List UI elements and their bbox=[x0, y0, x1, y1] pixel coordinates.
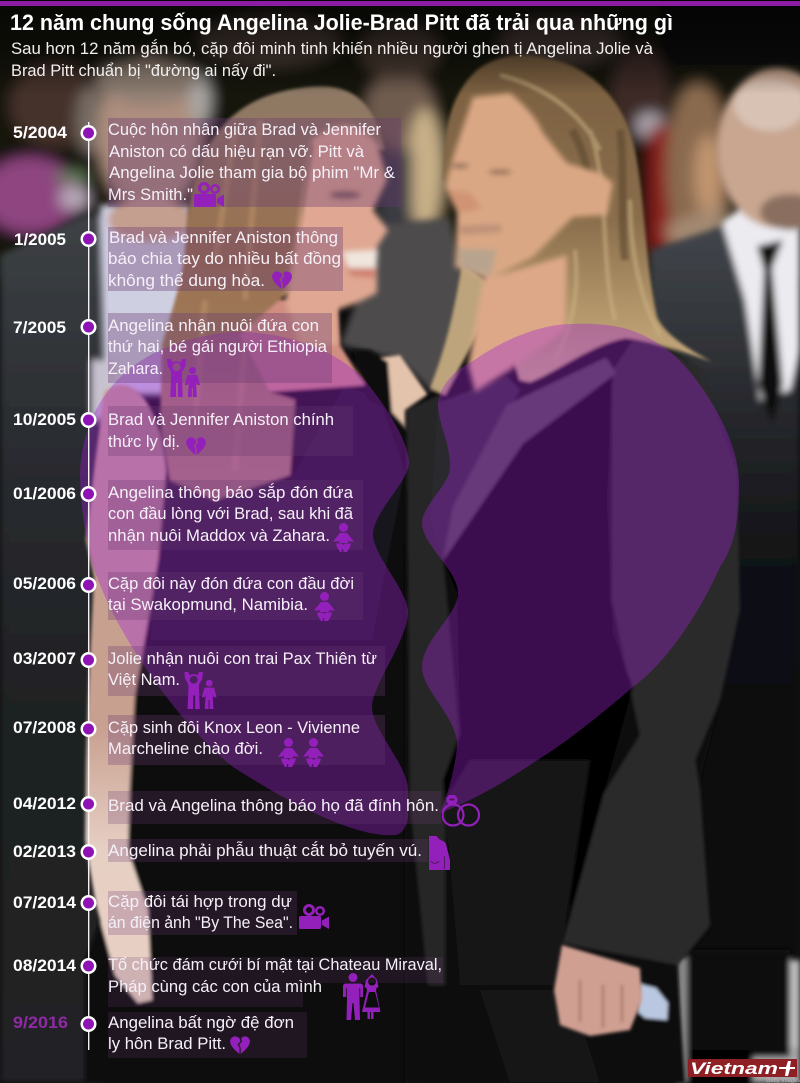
light ground behind the legs bbox=[677, 950, 800, 1083]
event: 1/2005: không thể dung hòa. bbox=[108, 271, 265, 290]
event: 1/2005: 1/2005 bbox=[14, 231, 66, 249]
event: 07/2008 bbox=[13, 715, 385, 767]
event: 9/2016: 9/2016 bbox=[13, 1014, 68, 1032]
event: 04/2012: Brad và Angelina thông báo họ đã đính hôn. bbox=[108, 796, 439, 815]
event: 05/2006: tại Swakopmund, Namibia. bbox=[108, 595, 308, 614]
grey jacket behind Brad's shoulder bbox=[340, 218, 470, 400]
event: 03/2007: 03/2007 bbox=[13, 650, 76, 668]
event: 03/2007: Việt Nam. bbox=[108, 670, 180, 689]
event: 01/2006: con đầu lòng với Brad, sau khi đã bbox=[108, 504, 354, 523]
event: 7/2005: Angelina nhận nuôi đứa con bbox=[108, 316, 319, 335]
event: 02/2013: 02/2013 bbox=[13, 843, 76, 861]
event: 08/2014: 08/2014 bbox=[13, 957, 77, 975]
right bald man bbox=[650, 68, 800, 1000]
event: 03/2007: Jolie nhận nuôi con trai Pax Thiên từ bbox=[108, 649, 377, 668]
event: 05/2006 bbox=[13, 572, 363, 621]
event: 07/2014: 07/2014 bbox=[13, 894, 77, 912]
Angelina's face bbox=[285, 126, 388, 345]
subtitle bbox=[11, 39, 654, 80]
event: 03/2007 bbox=[13, 646, 385, 709]
Brad's face bbox=[445, 93, 613, 392]
jacket front bbox=[443, 373, 633, 985]
event: 9/2016 bbox=[13, 1012, 307, 1058]
event: 07/2014: Cặp đôi tái hợp trong dự bbox=[108, 892, 292, 911]
event: 1/2005 bbox=[14, 227, 343, 291]
event: 10/2005: 10/2005 bbox=[13, 411, 76, 429]
event: 01/2006: Angelina thông báo sắp đón đứa bbox=[108, 483, 354, 502]
dress bbox=[85, 383, 420, 1083]
event: 9/2016: Angelina bất ngờ đệ đơn bbox=[108, 1013, 294, 1032]
event: 01/2006: nhận nuôi Maddox và Zahara. bbox=[108, 526, 330, 545]
left knit band bbox=[407, 395, 460, 985]
arm bbox=[85, 385, 166, 1003]
event: 5/2004: 5/2004 bbox=[13, 124, 68, 142]
event: 1/2005: Brad và Jennifer Aniston thông bbox=[109, 228, 338, 247]
event: 5/2004 bbox=[13, 118, 401, 207]
event: 02/2013: Angelina phải phẫu thuật cắt bỏ tuyến vú. bbox=[108, 841, 422, 860]
grey trouser patch bbox=[480, 990, 600, 1083]
top bar bbox=[0, 1, 800, 6]
event: 7/2005 bbox=[13, 313, 332, 397]
event: 08/2014: Tổ chức đám cưới bí mật tại Chateau Miraval, bbox=[108, 955, 442, 974]
lower jacket front bbox=[445, 760, 590, 985]
phone bbox=[638, 984, 668, 1020]
top dark fade bbox=[0, 0, 800, 95]
broken heart: right half bbox=[422, 324, 739, 813]
hair bbox=[443, 55, 712, 382]
event: 07/2008: Cặp sinh đôi Knox Leon - Vivienne bbox=[108, 718, 360, 737]
blurred crowd behind the couple bbox=[0, 0, 800, 280]
event: 01/2006: 01/2006 bbox=[13, 485, 76, 503]
event: 07/2008: 07/2008 bbox=[13, 719, 76, 737]
logo: Vietnam+ bbox=[688, 1059, 797, 1078]
event: 10/2005: thức ly dị. bbox=[108, 432, 180, 451]
subtitle: Sau hơn 12 năm gắn bó, cặp đôi minh tinh khiến nhiều người ghen tị Angelina Jolie và bbox=[11, 39, 654, 58]
broken heart: left half bbox=[80, 332, 409, 835]
event: 01/2006 bbox=[13, 480, 363, 552]
event: 7/2005: thứ hai, bé gái người Ethiopia bbox=[108, 337, 328, 356]
event: 04/2012: 04/2012 bbox=[13, 795, 76, 813]
event: 9/2016: ly hôn Brad Pitt. bbox=[108, 1034, 226, 1053]
shoulder bbox=[362, 355, 428, 440]
event: 05/2006: 05/2006 bbox=[13, 575, 76, 593]
event: 05/2006: Cặp đôi này đón đứa con đầu đời bbox=[108, 574, 354, 593]
event: 02/2013 bbox=[13, 836, 450, 870]
event: 08/2014 bbox=[13, 955, 443, 1020]
Brad bbox=[405, 55, 740, 1083]
event: 10/2005 bbox=[13, 406, 353, 456]
event: 08/2014: Pháp cùng các con của mình bbox=[108, 977, 322, 996]
sweater bbox=[430, 377, 520, 560]
event: 5/2004: Mrs Smith." bbox=[108, 185, 193, 204]
event: 7/2005: 7/2005 bbox=[13, 319, 66, 337]
timeline axis bbox=[88, 122, 89, 1050]
event: 5/2004: Aniston có dấu hiệu rạn vỡ. Pitt và bbox=[109, 142, 365, 161]
left man suit and shirt bbox=[0, 198, 192, 1083]
event: 5/2004: Cuộc hôn nhân giữa Brad và Jennifer bbox=[108, 120, 381, 139]
chest bbox=[210, 300, 365, 392]
event: 04/2012 bbox=[13, 791, 479, 826]
jacket body bbox=[405, 325, 740, 1083]
subtitle: Brad Pitt chuẩn bị "đường ai nấy đi". bbox=[11, 61, 276, 80]
Angelina bbox=[85, 86, 428, 1083]
event: 5/2004: Angelina Jolie tham gia bộ phim "Mr & bbox=[109, 163, 395, 182]
event: 10/2005: Brad và Jennifer Aniston chính bbox=[108, 410, 334, 429]
event: 07/2008: Marcheline chào đời. bbox=[108, 739, 263, 758]
event: 07/2014: án điện ảnh "By The Sea". bbox=[108, 913, 293, 932]
event: 07/2014 bbox=[13, 891, 329, 935]
title: 12 năm chung sống Angelina Jolie-Brad Pitt đã trải qua những gì bbox=[10, 10, 673, 35]
lapel bbox=[443, 358, 616, 560]
hair bbox=[160, 86, 385, 500]
Brad's hand bbox=[554, 945, 642, 1036]
sleeve bbox=[563, 330, 740, 965]
event: 7/2005: Zahara. bbox=[108, 359, 163, 378]
event: 1/2005: báo chia tay do nhiều bất đồng bbox=[108, 249, 341, 268]
logo: Vietnam+: Vietnam bbox=[690, 1059, 778, 1078]
